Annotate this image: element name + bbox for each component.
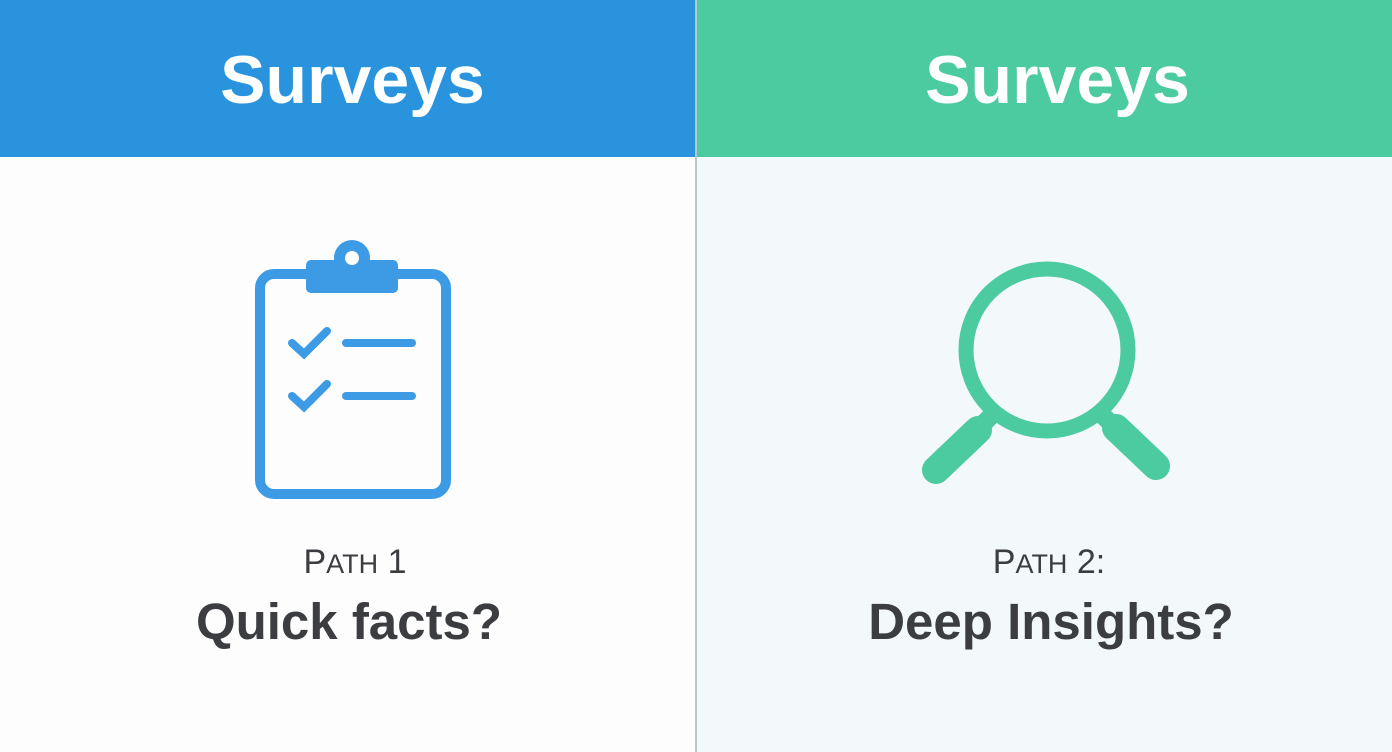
text: deep insights: Deep Insights? [868, 593, 1234, 650]
heading: left Surveys: Surveys [220, 42, 485, 118]
divider [695, 0, 697, 752]
text: path 2 label: PATH 2: [993, 543, 1105, 581]
heading: right Surveys: Surveys [925, 42, 1190, 118]
text: path 1 label: PATH 1 [303, 543, 407, 581]
heading: right Surveys [697, 0, 1392, 157]
icon: magnifier [922, 262, 1170, 484]
icon: clipboard [255, 240, 451, 499]
text: quick facts: Quick facts? [196, 593, 502, 650]
panel: left background [0, 157, 696, 752]
heading: left Surveys [0, 0, 695, 157]
panel: right background [697, 157, 1392, 752]
